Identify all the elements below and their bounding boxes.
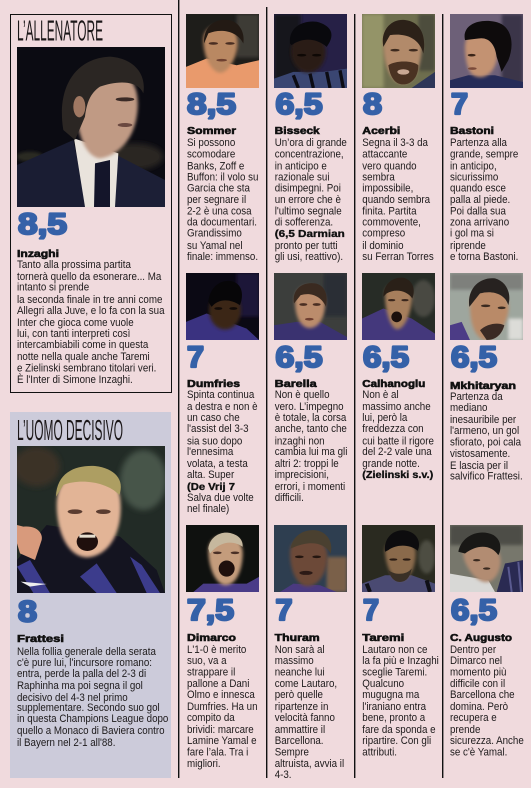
name: Bastoni: Bastoni (450, 125, 494, 137)
name: Barella: Barella (275, 378, 317, 390)
text: Bastoni verdict: quando esce (450, 182, 506, 195)
text: Dimarco verdict: pallone a Dani (187, 677, 249, 690)
text: Calhanoglu verdict (362, 388, 434, 481)
text: Thuram verdict: altruista, avvia il (275, 757, 344, 770)
text: C. Augusto verdict: Dentro per (450, 643, 497, 656)
text: Mkhitaryan verdict: salvifico Frattesi. (450, 470, 523, 483)
score: 8,5: 8,5 (18, 208, 67, 241)
photo: Acerbi (362, 14, 435, 88)
text: Dumfries verdict (187, 388, 258, 515)
panel: Mkhitaryan (450, 273, 523, 483)
text: Frattesi verdict: in questa Champions League dopo (17, 712, 168, 725)
text: Bisseck verdict: un errore che è (275, 193, 341, 206)
text: Dumfries verdict: (De Vrij 7 (187, 481, 236, 493)
text: Bastoni verdict: zona arrivano (450, 216, 509, 229)
text: Bisseck verdict: (6,5 Darmian (275, 228, 345, 240)
text: Mkhitaryan verdict: inesauribile per (450, 413, 517, 426)
text: Calhanoglu verdict: lui, però la (362, 411, 407, 424)
text: C. Augusto verdict: recupera e (450, 711, 497, 724)
text: Taremi verdict: mugugna ma (362, 688, 419, 701)
text: Thuram verdict: massimo (275, 654, 314, 667)
text: Bastoni verdict: in anticipo, (450, 160, 497, 173)
text: Acerbi verdict: impossibile, (362, 182, 413, 195)
text: C. Augusto verdict: momento più (450, 666, 507, 679)
panel: Acerbi (362, 14, 435, 263)
text: Calhanoglu verdict: massimo anche (362, 400, 431, 413)
text: Acerbi verdict (362, 136, 434, 263)
text: Frattesi verdict: il Bayern nel 2-1 all'88. (17, 736, 115, 749)
text: Thuram verdict (275, 643, 344, 781)
text: Barella verdict: è totale, la corsa (275, 411, 346, 424)
text: Thuram verdict: Non sarà al (275, 643, 325, 656)
name: C. Augusto: C. Augusto (450, 632, 512, 644)
photo: Taremi (362, 525, 435, 592)
score: 6,5: 6,5 (276, 88, 322, 121)
name: Frattesi: Frattesi (17, 633, 64, 645)
text: Inzaghi verdict: intercambiabili come in questa (17, 338, 148, 351)
text: Barella verdict: imprecisioni, (275, 468, 329, 481)
text: Acerbi verdict: vero quando (362, 160, 417, 173)
panel: Dumfries (186, 273, 259, 515)
name: Mkhitaryan: Mkhitaryan (450, 380, 516, 392)
text: Acerbi verdict: quando sembra (362, 193, 430, 206)
text: Dimarco verdict: Lamine Yamal e (187, 734, 257, 747)
name: Acerbi: Acerbi (362, 125, 400, 137)
text: Sommer verdict (187, 136, 259, 263)
name: Dimarco: Dimarco (187, 632, 236, 644)
score: 8,5: 8,5 (187, 88, 236, 121)
text: Inzaghi verdict: la seconda finale in tre anni come (17, 293, 162, 306)
text: Dumfries verdict: alta. Super (187, 468, 235, 481)
name: Sommer: Sommer (187, 125, 236, 137)
text: Thuram verdict: velocità fanno (275, 711, 335, 724)
text: Acerbi verdict: Segna il 3-3 da (362, 136, 428, 149)
text: Dumfries verdict: sia suo dopo (187, 435, 242, 448)
text: Dumfries verdict: a destra e non è (187, 400, 258, 413)
text: C. Augusto verdict: se c'è Yamal. (450, 746, 507, 759)
text: Taremi verdict: l'iraniano entra (362, 700, 426, 713)
text: Calhanoglu verdict: cui batte il rigore (362, 435, 434, 448)
text: Bastoni verdict: riprende (450, 239, 486, 252)
panel: Sommer (186, 14, 259, 263)
text: Inzaghi verdict: lui, con tanti interpreti così (17, 327, 130, 340)
text: C. Augusto verdict: Dimarco nel (450, 654, 502, 667)
text: Bisseck verdict: in anticipo e (275, 160, 327, 173)
text: Sommer verdict: finale: immenso. (187, 250, 258, 263)
text: Acerbi verdict: commovente, (362, 216, 421, 229)
score: 8: 8 (363, 88, 382, 121)
name: Thuram: Thuram (275, 632, 320, 644)
text: Bastoni verdict: grande, sempre (450, 148, 518, 161)
text: Bisseck verdict: gli usi, reattivo). (275, 250, 343, 263)
text: Mkhitaryan verdict (450, 390, 523, 483)
text: Bastoni verdict: i gol ma si (450, 227, 494, 240)
score: 7: 7 (363, 594, 379, 627)
text: Sommer verdict: Garcia che sta (187, 182, 250, 195)
text: Bisseck verdict: di sofferenza. (275, 216, 333, 229)
text: Taremi verdict (362, 643, 439, 759)
name: Bisseck: Bisseck (275, 125, 320, 137)
panel: Thuram (274, 525, 347, 781)
panel: L'allenatore (10, 14, 172, 392)
text: Taremi verdict: la fa più e Inzaghi (362, 654, 439, 667)
text: Inzaghi verdict: tornerà quello da esonerare... Ma (17, 270, 161, 283)
text: Frattesi verdict: Raphinha ma poi segna il gol (17, 679, 143, 692)
text: Sommer verdict: 2-2 è una cosa (187, 205, 252, 218)
panel: Taremi (362, 525, 439, 759)
text: Barella verdict: errori, i momenti (275, 480, 345, 493)
text: Bisseck verdict (275, 136, 347, 263)
score: 7: 7 (276, 594, 292, 627)
photo: Calhanoglu (362, 273, 435, 340)
score: 6,5: 6,5 (451, 594, 497, 627)
panel: Bisseck (274, 14, 347, 263)
photo: Dumfries (186, 273, 259, 340)
text: Thuram verdict: però quelle (275, 688, 323, 701)
text: Taremi verdict: Lautaro non ce (362, 643, 428, 656)
text: Acerbi verdict: compreso (362, 227, 405, 240)
text: Bastoni verdict: palla al piede. (450, 193, 510, 206)
text: Inzaghi verdict: intanto si prende (17, 281, 89, 294)
text: Thuram verdict: ammattire il (275, 723, 325, 736)
text: Thuram verdict: ripartenze in (275, 700, 329, 713)
panel: L'uomo decisivo: L’UOMO DECISIVO (17, 415, 123, 447)
text: Sommer verdict: Banks, Zoff e (187, 160, 244, 173)
name: Dumfries: Dumfries (187, 378, 240, 390)
panel: Calhanoglu (362, 273, 435, 481)
text: Sommer verdict: Buffon: il volo su (187, 171, 259, 184)
text: Bisseck verdict: razionale sui (275, 171, 329, 184)
text: Thuram verdict: Sempre (275, 746, 309, 759)
text: Inzaghi verdict: notte nella quale anche Taremi (17, 350, 150, 363)
text: Taremi verdict: bene, pronto a (362, 711, 425, 724)
text: Mkhitaryan verdict: l'armeno, un gol (450, 424, 519, 437)
photo: Barella (274, 273, 347, 340)
text: Barella verdict: cambia lui ma gli (275, 445, 347, 458)
text: Bisseck verdict: l'ultimo segnale (275, 205, 342, 218)
text: Bastoni verdict: e torna Bastoni. (450, 250, 518, 263)
text: Bisseck verdict: concentrazione, (275, 148, 344, 161)
text: Dumfries verdict: volata, a testa (187, 457, 248, 470)
text: Inzaghi verdict: Tanto alla prossima partita (17, 258, 131, 271)
text: Bisseck verdict: disimpegni. Poi (275, 182, 341, 195)
text: Frattesi verdict: decisivo del 4-3 nel primo (17, 691, 128, 704)
text: Dumfries verdict: un caso che (187, 411, 240, 424)
text: Acerbi verdict: sembra (362, 171, 395, 184)
text: C. Augusto verdict: Barcellona che (450, 688, 515, 701)
text: Sommer verdict: per segnare il (187, 193, 246, 206)
photo: Bastoni (450, 14, 523, 88)
photo: Frattesi (17, 446, 165, 593)
text: Thuram verdict: 4-3. (275, 768, 292, 781)
text: Frattesi verdict: Nella follia generale della serata (17, 645, 156, 658)
text: Taremi verdict: sceglie Taremi. (362, 666, 427, 679)
text: Acerbi verdict: attaccante (362, 148, 407, 161)
text: C. Augusto verdict: domina. Però (450, 700, 508, 713)
text: Dumfries verdict: Salva due volte (187, 491, 254, 504)
text: Bastoni verdict: sicurissimo (450, 171, 498, 184)
panel: L'uomo decisivo (10, 412, 171, 778)
text: Sommer verdict: da documentari. (187, 216, 257, 229)
score: 6,5: 6,5 (363, 341, 409, 374)
text: Acerbi verdict: finita. Partita (362, 205, 417, 218)
text: Barella verdict: difficili. (275, 491, 304, 504)
text: Frattesi verdict: supplementare. Secondo suo gol (17, 701, 160, 714)
text: Barella verdict: Non è quello (275, 388, 330, 401)
text: Thuram verdict: neanche lui (275, 666, 325, 679)
text: Dimarco verdict: L'1-0 è merito (187, 643, 246, 656)
panel: Barella (274, 273, 347, 504)
text: Frattesi verdict: entra, perde la palla del 2-3 di (17, 667, 146, 680)
name: Calhanoglu: Calhanoglu (362, 378, 425, 390)
text: Inzaghi verdict: È l'Inter di Simone Inzaghi. (17, 372, 133, 386)
text: Taremi verdict: Qualcuno (362, 677, 404, 690)
text: Mkhitaryan verdict: E lascia per il (450, 459, 508, 472)
text: Inzaghi verdict: Allegri alla Juve, e lo fa con la sua (17, 304, 165, 317)
text: Dimarco verdict: brividi: marcare (187, 723, 254, 736)
score: 8: 8 (18, 596, 37, 628)
text: Thuram verdict: Barcellona. (275, 734, 324, 747)
text: Barella verdict: inzaghi non (275, 435, 325, 448)
text: Dumfries verdict: l'assist del 3-3 (187, 422, 249, 435)
text: Dimarco verdict: compito da (187, 711, 235, 724)
text: Calhanoglu verdict: (Zielinski s.v.) (362, 469, 433, 481)
text: Bisseck verdict: Un’ora di grande (275, 136, 347, 149)
text: Dimarco verdict: migliori. (187, 757, 221, 770)
text: Dimarco verdict: strappare il (187, 666, 235, 679)
text: Frattesi verdict: quello a Monaco di Baviera contro (17, 724, 165, 737)
text: Barella verdict (275, 388, 347, 504)
text: Calhanoglu verdict: del 2-2 vale una (362, 445, 432, 458)
text: C. Augusto verdict: difficile con il (450, 677, 505, 690)
text: Taremi verdict: ripartire. Con gli (362, 734, 431, 747)
text: Mkhitaryan verdict: Partenza da (450, 390, 503, 403)
text: Mkhitaryan verdict: sfiorato, poi cala (450, 436, 521, 449)
name: Taremi: Taremi (362, 632, 404, 644)
text: Barella verdict: altri 2: troppi le (275, 457, 339, 470)
text: Dumfries verdict: nel finale) (187, 502, 229, 515)
text: Taremi verdict: attributi. (362, 746, 397, 759)
text: Calhanoglu verdict: grande notte. (362, 457, 420, 470)
photo: Thuram (274, 525, 347, 592)
photo: Bisseck (274, 14, 347, 88)
text: Inzaghi verdict (17, 258, 165, 386)
score: 6,5: 6,5 (276, 341, 322, 374)
text: Sommer verdict: su Yamal nel (187, 239, 243, 252)
photo: Inzaghi (17, 47, 165, 207)
photo: Sommer (186, 14, 259, 88)
text: Calhanoglu verdict: freddezza con (362, 422, 424, 435)
text: Dimarco verdict: Dumfries. Ha un (187, 700, 258, 713)
text: Acerbi verdict: su Ferran Torres (362, 250, 434, 263)
panel: C. Augusto (450, 525, 524, 759)
text: Bastoni verdict: Poi dalla sua (450, 205, 506, 218)
photo: Dimarco (186, 525, 259, 592)
photo: Mkhitaryan (450, 273, 523, 340)
photo: C. Augusto (450, 525, 523, 592)
text: Frattesi verdict (17, 645, 168, 749)
text: Barella verdict: vero. L’impegno (275, 400, 344, 413)
score: 6,5: 6,5 (451, 341, 497, 374)
score: 7: 7 (187, 341, 204, 374)
text: Thuram verdict: come Lautaro, (275, 677, 337, 690)
score: 7,5: 7,5 (187, 594, 234, 627)
text: Dimarco verdict: Olmo e innesca (187, 688, 255, 701)
panel: Dimarco (186, 525, 259, 770)
text: Taremi verdict: fare da sponda e (362, 723, 436, 736)
text: Calhanoglu verdict: Non è al (362, 388, 399, 401)
text: Sommer verdict: scomodare (187, 148, 235, 161)
score: 7: 7 (451, 88, 468, 121)
text: Mkhitaryan verdict: vistosamente. (450, 447, 510, 460)
text: Dimarco verdict: suo, va a (187, 654, 227, 667)
text: Acerbi verdict: il dominio (362, 239, 404, 252)
text: Bisseck verdict: pronto per tutti (275, 239, 338, 252)
text: C. Augusto verdict: sicurezza. Anche (450, 734, 524, 747)
text: Frattesi verdict: c'è pure lui, l'incursore romano: (17, 656, 152, 669)
name: Inzaghi: Inzaghi (17, 248, 59, 260)
panel: Bastoni (450, 14, 523, 263)
text: Mkhitaryan verdict: mediano (450, 401, 488, 414)
text: Inzaghi verdict: Inter che gioca come vuole (17, 316, 134, 329)
text: Bastoni verdict: Partenza alla (450, 136, 507, 149)
text: C. Augusto verdict (450, 643, 524, 759)
text: Dumfries verdict: Spinta continua (187, 388, 254, 401)
text: Sommer verdict: Grandissimo (187, 227, 242, 240)
panel: L'allenatore: L’ALLENATORE (17, 16, 103, 48)
text: Inzaghi verdict: e Zielinski sembrano titolari veri. (17, 362, 156, 375)
text: Barella verdict: anche, tanto che (275, 422, 347, 435)
text: Dimarco verdict (187, 643, 258, 770)
text: Dimarco verdict: fare l’ala. Tra i (187, 746, 248, 759)
text: C. Augusto verdict: prende (450, 723, 481, 736)
text: Sommer verdict: Si possono (187, 136, 235, 149)
text: Dumfries verdict: l'ennesima (187, 445, 233, 458)
text: Bastoni verdict (450, 136, 518, 263)
